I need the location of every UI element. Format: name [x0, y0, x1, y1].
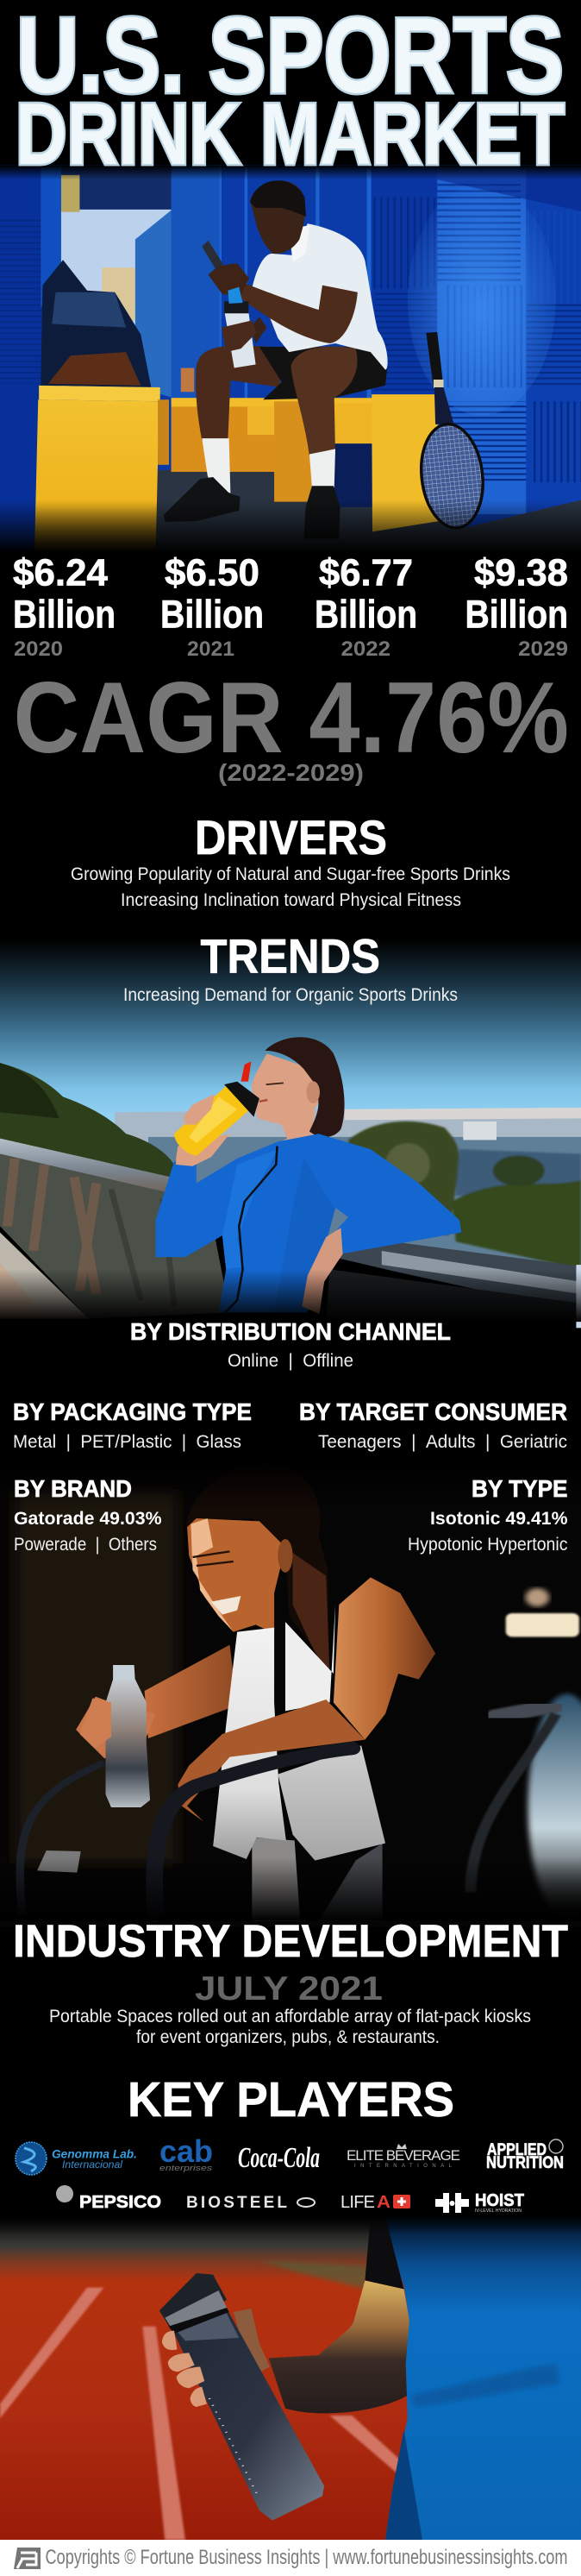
pants — [252, 1838, 383, 1921]
foliage — [348, 1122, 581, 1269]
photo: runner with bottle on track — [0, 2217, 581, 2540]
logo: Genomma Lab: Genomma Lab. — [52, 2146, 137, 2160]
bike handle — [154, 1749, 352, 1915]
segment: distribution channel: Online | Offline — [228, 1351, 353, 1371]
logo: LifeAid — [340, 2193, 410, 2212]
figure 2020: Billion — [13, 592, 116, 637]
figure 2029: 2029 — [518, 638, 568, 661]
logo: Elite Beverage — [347, 2144, 460, 2169]
segment: brand: BY BRAND — [14, 1475, 132, 1502]
logo: Applied Nutrition: APPLIED — [487, 2141, 547, 2159]
photo: woman drinking from shaker — [0, 1037, 581, 1328]
logo: Hoist: HOIST — [475, 2191, 524, 2210]
segment: target consumer: BY TARGET CONSUMER — [299, 1398, 567, 1425]
key players heading: KEY PLAYERS — [128, 2072, 454, 2127]
logo: BioSteel: BIOSTEEL — [186, 2194, 287, 2212]
figure 2022: $6.77 — [319, 552, 413, 594]
title — [16, 0, 565, 183]
segment: packaging type: BY PACKAGING TYPE — [13, 1398, 252, 1425]
water bottle — [159, 2273, 324, 2521]
railing — [0, 1139, 581, 1328]
man — [164, 180, 388, 538]
yellow box — [34, 386, 169, 552]
segment: packaging type — [13, 1398, 252, 1452]
logo: Hoist: IV-LEVEL HYDRATION — [475, 2208, 522, 2214]
figure 2022 — [315, 552, 417, 661]
segment: type: Hypotonic Hypertonic — [408, 1535, 567, 1555]
figure 2020: 2020 — [14, 638, 63, 661]
logo: Applied Nutrition: NUTRITION — [486, 2154, 564, 2172]
figure 2021 — [160, 552, 264, 661]
logo: Elite Beverage: ELITE BEVERAGE — [347, 2147, 460, 2164]
woman — [156, 1037, 461, 1316]
woman — [76, 1463, 459, 1863]
bench — [172, 394, 439, 531]
figure 2022: 2022 — [341, 638, 390, 661]
logo: LifeAid: LIFE — [340, 2193, 375, 2212]
icon: Fortune Business Insights logo — [14, 2548, 41, 2569]
runner — [234, 2217, 581, 2540]
trends: TRENDS — [200, 928, 380, 983]
market size figures — [13, 552, 568, 661]
logo: PepsiCo: PEPSICO — [79, 2193, 161, 2212]
photo: athlete in locker room — [0, 166, 581, 552]
fingers — [162, 2331, 207, 2407]
footer: copyright bar — [0, 2540, 581, 2576]
industry development: Portable Spaces rolled out an affordable array of flat-pack kiosks — [49, 2007, 531, 2026]
sky backdrop — [0, 940, 581, 1147]
track lanes — [0, 2288, 402, 2540]
segment: distribution channel: BY DISTRIBUTION CHANNEL — [130, 1318, 451, 1345]
drivers — [71, 810, 510, 910]
drivers: Increasing Inclination toward Physical Fitness — [121, 890, 461, 910]
segment: packaging type: Metal | PET/Plastic | Glass — [13, 1432, 241, 1452]
CAGR: (2022-2029) — [218, 759, 364, 786]
figure 2021: Billion — [160, 592, 264, 637]
segment: distribution channel — [130, 1318, 451, 1371]
tennis racket — [416, 332, 488, 531]
figure 2021: $6.50 — [165, 552, 259, 594]
figure 2020: $6.24 — [13, 552, 109, 594]
segment: type: BY TYPE — [472, 1475, 567, 1502]
logo: PepsiCo — [56, 2185, 161, 2212]
railing structure — [8, 1159, 174, 1306]
logo: Genomma Lab: Internacional — [62, 2158, 122, 2171]
segment: brand: Powerade | Others — [14, 1535, 157, 1555]
segment: brand — [14, 1475, 162, 1555]
gym bag — [41, 260, 151, 387]
drivers: DRIVERS — [195, 810, 387, 864]
drivers: Growing Popularity of Natural and Sugar-free Sports Drinks — [71, 864, 510, 884]
segment: target consumer — [299, 1398, 567, 1452]
figure 2029: Billion — [465, 592, 568, 637]
industry development: for event organizers, pubs, & restaurants. — [136, 2027, 440, 2047]
logo: LifeAid: A — [377, 2193, 390, 2212]
logo: Hoist — [435, 2191, 524, 2214]
logo: Applied Nutrition — [486, 2139, 564, 2172]
segment: type: Isotonic 49.41% — [430, 1509, 568, 1529]
trends — [123, 928, 458, 1005]
figure 2022: Billion — [315, 592, 417, 637]
segment: brand: Gatorade 49.03% — [14, 1509, 162, 1529]
figure 2029: $9.38 — [474, 552, 568, 594]
trends: Increasing Demand for Organic Sports Drinks — [123, 985, 458, 1005]
segment: type — [408, 1475, 568, 1555]
figure 2021: 2021 — [187, 638, 234, 661]
figure 2029 — [465, 552, 568, 661]
photo: woman with towel and water bottle — [0, 1461, 581, 1926]
industry development: JULY 2021 — [195, 1970, 383, 2007]
logo: Coca-Cola: Coca-Cola — [238, 2142, 320, 2174]
logo: cab enterprises: enterprises — [159, 2164, 213, 2172]
logo: cab enterprises: cab — [159, 2133, 213, 2169]
industry development — [13, 1916, 568, 2047]
logo: Elite Beverage: INTERNATIONAL — [354, 2164, 453, 2169]
figure 2020 — [13, 552, 116, 661]
segment: target consumer: Teenagers | Adults | Geriatric — [318, 1432, 567, 1452]
logo: Genomma Lab — [16, 2142, 137, 2175]
